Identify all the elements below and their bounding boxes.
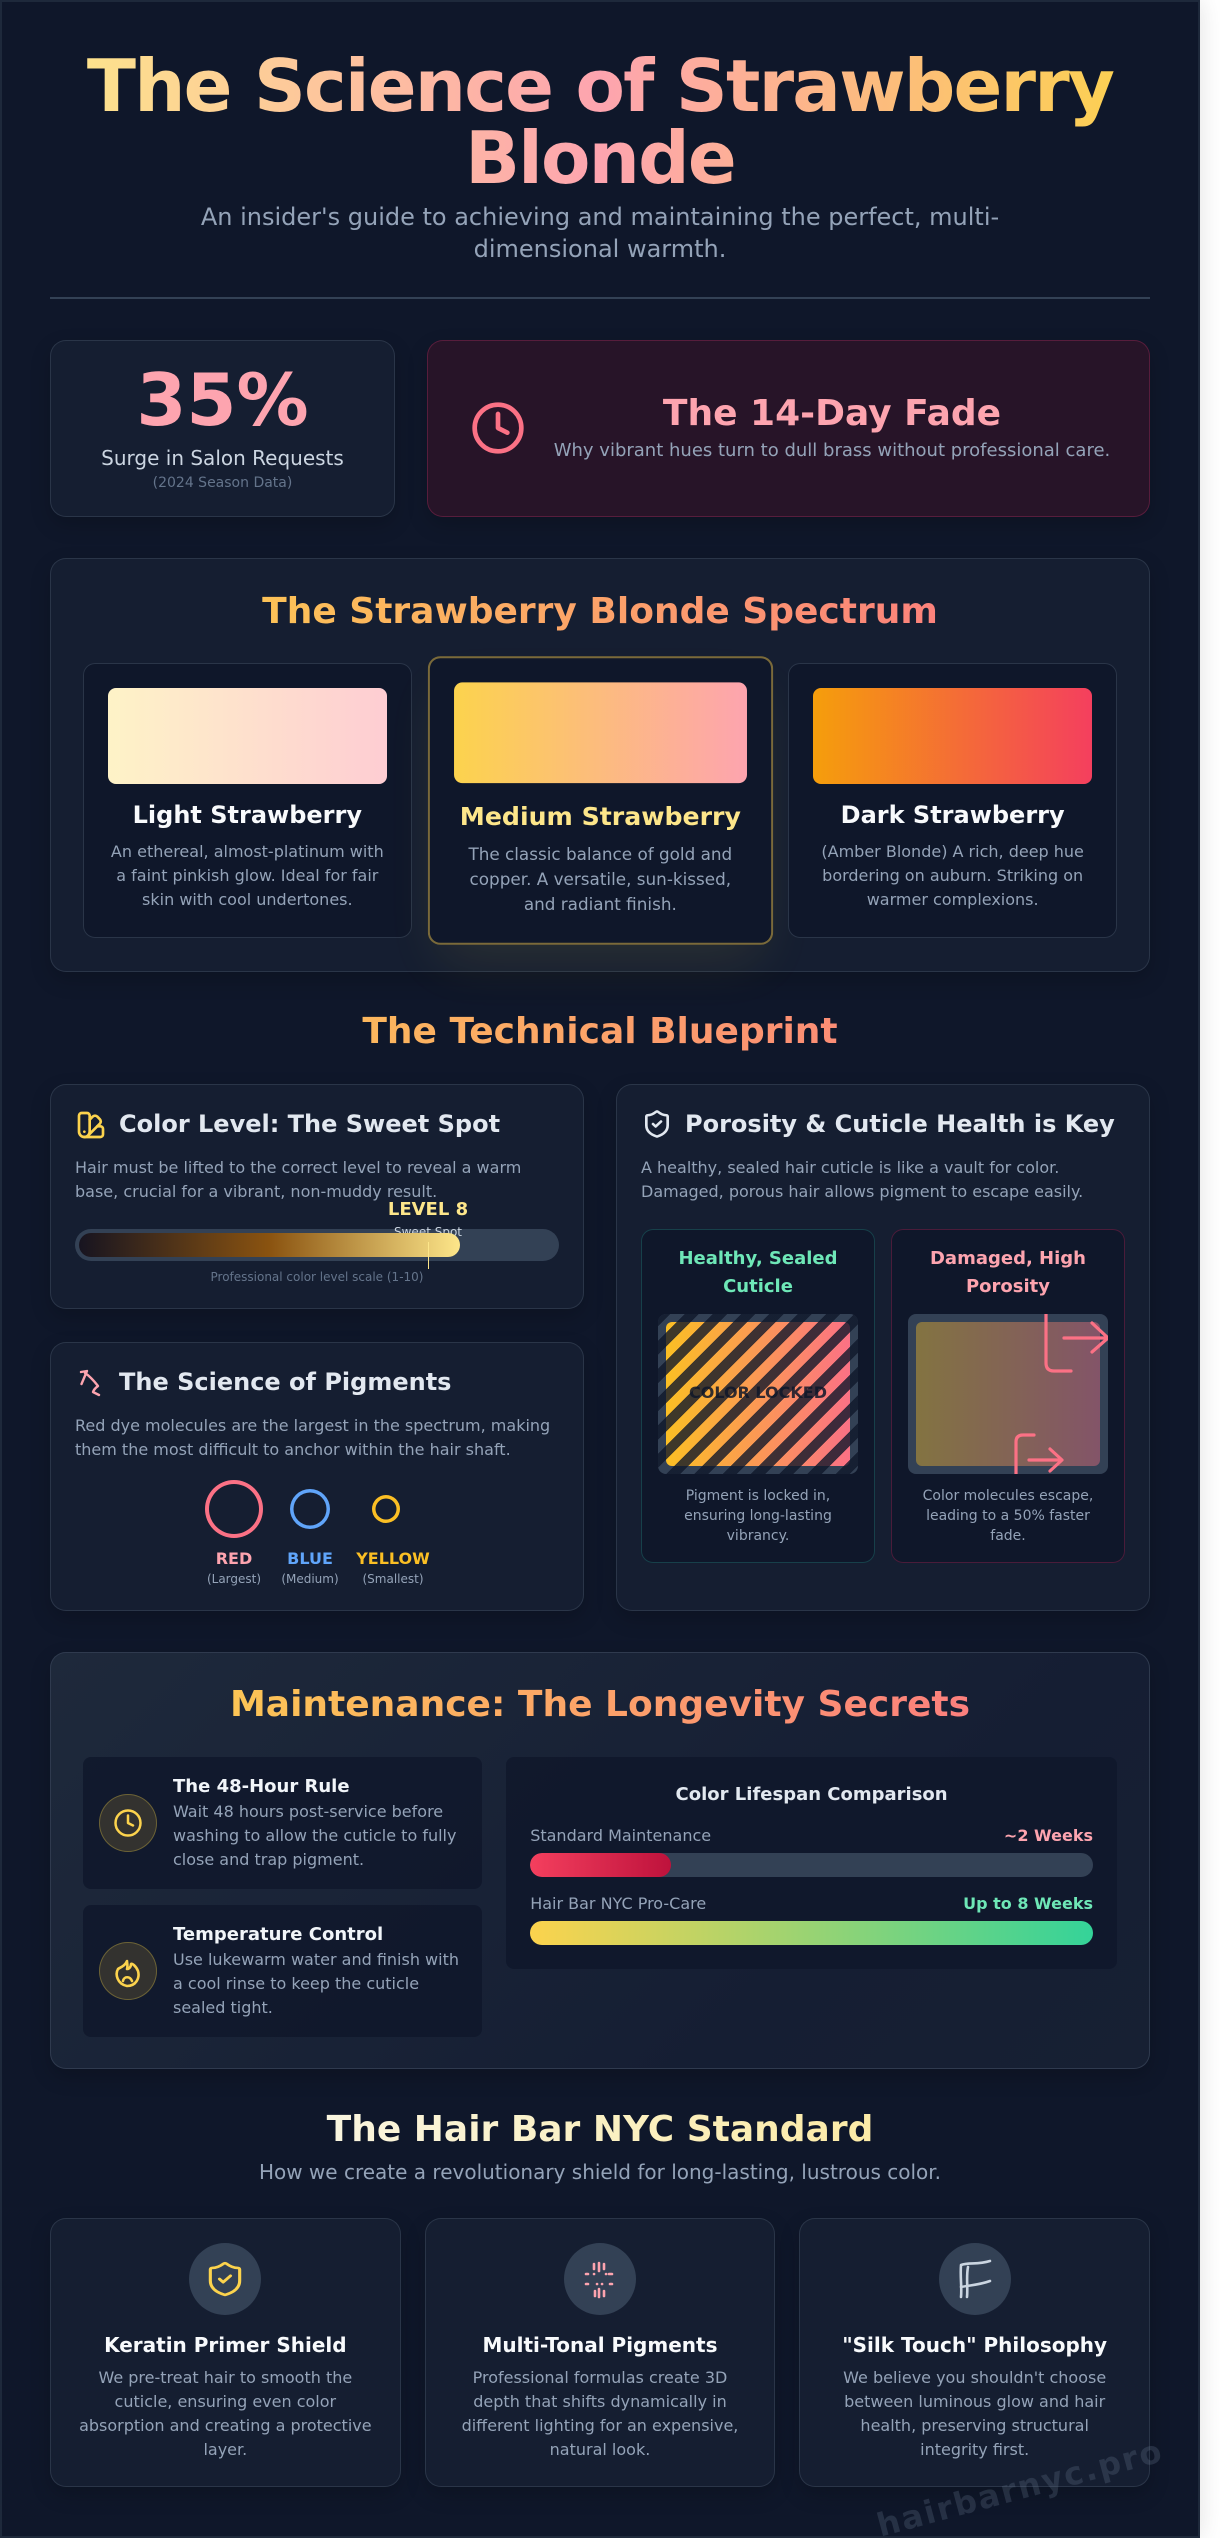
panel: 14-day fade <box>427 340 1150 517</box>
card: light strawberry <box>83 663 412 938</box>
title: Blonde <box>465 116 735 200</box>
card: damaged cuticle <box>891 1229 1125 1563</box>
heading: technical blueprint <box>50 1008 1150 1056</box>
panel: 35% surge stat <box>50 340 395 517</box>
porosity text: A healthy, sealed hair cuticle is like a vault for color. <box>641 1158 1059 1177</box>
color level text: Hair must be lifted to the correct level to reveal a warm <box>75 1158 521 1177</box>
card: healthy cuticle <box>641 1229 875 1563</box>
damaged heading: Damaged, High <box>930 1248 1086 1269</box>
molecule: yellow <box>372 1495 400 1523</box>
damaged caption: fade. <box>990 1528 1026 1544</box>
tip text: a cool rinse to keep the cuticle <box>173 1974 419 1993</box>
multi-tonal text: different lighting for an expensive, <box>462 2416 738 2435</box>
pigments text: them the most difficult to anchor within the hair shaft. <box>75 1440 511 1459</box>
tip text <box>173 1950 459 2017</box>
multi-tonal text: Professional formulas create 3D <box>473 2368 727 2387</box>
diagram: locked pigment <box>658 1314 858 1474</box>
panel: spectrum <box>50 558 1150 972</box>
card: keratin <box>50 2218 401 2487</box>
scale caption: Professional color level scale (1-10) <box>210 1270 423 1284</box>
value: 2 weeks: ~2 Weeks <box>1004 1826 1093 1845</box>
description: dark: (Amber Blonde) A rich, deep hue <box>821 842 1084 861</box>
title: The Science of Strawberry <box>87 44 1113 128</box>
keratin text: We pre-treat hair to smooth the <box>98 2368 352 2387</box>
name: dark: Dark Strawberry <box>841 801 1065 829</box>
subtitle: dimensional warmth. <box>474 235 726 263</box>
tip text: Wait 48 hours post-service before <box>173 1802 443 1821</box>
keratin text: layer. <box>203 2440 247 2459</box>
tip title: Temperature Control <box>173 1924 383 1945</box>
color level text: base, crucial for a vibrant, non-muddy result. <box>75 1182 437 1201</box>
pigments text <box>75 1416 550 1459</box>
tip: temperature <box>83 1905 482 2037</box>
healthy heading <box>678 1248 838 1297</box>
healthy caption: ensuring long-lasting <box>684 1508 832 1524</box>
bar: pro-care <box>530 1921 1093 1945</box>
description: light: a faint pinkish glow. Ideal for fair <box>116 866 378 885</box>
label: standard: Standard Maintenance <box>530 1826 711 1845</box>
fade text: Why vibrant hues turn to dull brass without professional care. <box>554 440 1110 461</box>
heading: hair bar standard <box>50 2106 1150 2154</box>
title <box>50 50 1150 194</box>
tip text: close and trap pigment. <box>173 1850 364 1869</box>
name: medium: Medium Strawberry <box>459 802 741 831</box>
multi-tonal text <box>462 2368 738 2459</box>
description: dark: warmer complexions. <box>867 890 1039 909</box>
description: light: An ethereal, almost-platinum with <box>111 842 384 861</box>
chart title: Color Lifespan Comparison <box>676 1784 948 1805</box>
icon: swatch book <box>78 1112 104 1138</box>
keratin text <box>79 2368 372 2459</box>
porosity text: Damaged, porous hair allows pigment to escape easily. <box>641 1182 1083 1201</box>
marker line <box>428 1242 429 1269</box>
silk title: "Silk Touch" Philosophy <box>842 2333 1107 2357</box>
keratin title: Keratin Primer Shield <box>104 2333 347 2357</box>
chart: color lifespan <box>506 1757 1117 1969</box>
diagram: locked pigment: COLOR LOCKED <box>689 1383 827 1402</box>
silk text <box>843 2368 1106 2459</box>
marker label: sweet spot: Sweet Spot <box>394 1225 462 1239</box>
silk text: We believe you shouldn't choose <box>843 2368 1106 2387</box>
description: dark <box>821 842 1084 909</box>
multi-tonal text: natural look. <box>550 2440 650 2459</box>
icon: pigment squiggle <box>80 1370 100 1396</box>
icon: clock <box>472 402 524 454</box>
maintenance heading: Maintenance: The Longevity Secrets <box>230 1684 970 1725</box>
stat source: (2024 Season Data) <box>153 475 292 491</box>
swatch: dark <box>813 688 1092 784</box>
description: medium: and radiant finish. <box>523 894 676 914</box>
label: red: RED <box>216 1549 252 1568</box>
label: yellow: YELLOW <box>356 1549 430 1568</box>
icon: shield badge <box>189 2243 261 2315</box>
icon: flame badge <box>99 1942 157 2000</box>
card: silk touch <box>799 2218 1150 2487</box>
tip text: Use lukewarm water and finish with <box>173 1950 459 1969</box>
damaged heading: Porosity <box>966 1276 1050 1297</box>
card: medium strawberry <box>427 656 773 945</box>
label: pro-care: Hair Bar NYC Pro-Care <box>530 1894 706 1913</box>
keratin text: cuticle, ensuring even color <box>115 2392 336 2411</box>
label: yellow size: (Smallest) <box>362 1572 424 1586</box>
description: light <box>111 842 384 909</box>
standard subtitle: How we create a revolutionary shield for long-lasting, lustrous color. <box>259 2160 941 2184</box>
label: blue: BLUE <box>287 1549 333 1568</box>
panel: color level <box>50 1084 584 1309</box>
multi-tonal title: Multi-Tonal Pigments <box>482 2333 717 2357</box>
pigments heading: The Science of Pigments <box>119 1368 451 1396</box>
scale track <box>75 1229 559 1261</box>
swatch: light <box>108 688 387 784</box>
silk text: health, preserving structural <box>860 2416 1089 2435</box>
porosity text <box>641 1158 1083 1201</box>
color level heading: Color Level: The Sweet Spot <box>119 1110 500 1138</box>
icon: silk badge <box>939 2243 1011 2315</box>
panel: porosity <box>616 1084 1150 1611</box>
tip text: sealed tight. <box>173 1998 273 2017</box>
level scale chart <box>75 1199 559 1284</box>
label: red size: (Largest) <box>207 1572 261 1586</box>
scale fill <box>79 1233 460 1257</box>
heading: hair bar standard: The Hair Bar NYC Standard <box>327 2109 873 2150</box>
silk text: integrity first. <box>920 2440 1029 2459</box>
icon: shield <box>645 1110 669 1138</box>
healthy caption <box>684 1488 832 1544</box>
tip title: The 48-Hour Rule <box>173 1776 350 1797</box>
damaged caption: Color molecules escape, <box>923 1488 1093 1504</box>
label: blue size: (Medium) <box>281 1572 339 1586</box>
diagram: escaping pigment <box>908 1314 1108 1474</box>
marker label: level 8: LEVEL 8 <box>388 1199 468 1220</box>
swatch: medium <box>454 682 746 783</box>
subtitle <box>201 203 999 263</box>
damaged caption <box>923 1488 1093 1544</box>
pigments text: Red dye molecules are the largest in the spectrum, making <box>75 1416 550 1435</box>
value: 8 weeks: Up to 8 Weeks <box>963 1894 1093 1913</box>
tip: 48-hour rule <box>83 1757 482 1889</box>
healthy heading: Healthy, Sealed <box>678 1248 838 1269</box>
icon: pigments badge <box>564 2243 636 2315</box>
color level text <box>75 1158 521 1201</box>
keratin text: absorption and creating a protective <box>79 2416 372 2435</box>
molecule: blue <box>290 1489 330 1529</box>
panel: maintenance <box>50 1652 1150 2069</box>
molecule: red <box>205 1480 263 1538</box>
damaged heading <box>930 1248 1086 1297</box>
subtitle: An insider's guide to achieving and maintaining the perfect, multi- <box>201 203 999 231</box>
healthy caption: vibrancy. <box>727 1528 789 1544</box>
multi-tonal text: depth that shifts dynamically in <box>473 2392 727 2411</box>
healthy caption: Pigment is locked in, <box>686 1488 830 1504</box>
stat number: 35% <box>136 358 309 442</box>
description: medium <box>468 844 732 914</box>
description: medium: copper. A versatile, sun-kissed, <box>469 869 731 889</box>
silk text: between luminous glow and hair <box>844 2392 1105 2411</box>
icon: clock badge <box>99 1794 157 1852</box>
panel: pigments <box>50 1342 584 1611</box>
spectrum heading: The Strawberry Blonde Spectrum <box>262 591 938 632</box>
tip text: washing to allow the cuticle to fully <box>173 1826 456 1845</box>
porosity heading: Porosity & Cuticle Health is Key <box>685 1110 1115 1138</box>
damaged caption: leading to a 50% faster <box>926 1508 1090 1524</box>
description: medium: The classic balance of gold and <box>468 844 732 864</box>
maintenance heading <box>83 1681 1117 1729</box>
healthy heading: Cuticle <box>723 1276 793 1297</box>
stat label: Surge in Salon Requests <box>101 446 344 470</box>
card: multi-tonal <box>425 2218 775 2487</box>
description: dark: bordering on auburn. Striking on <box>822 866 1083 885</box>
name: light: Light Strawberry <box>133 801 362 829</box>
fade heading: The 14-Day Fade <box>663 393 1001 434</box>
description: light: skin with cool undertones. <box>142 890 353 909</box>
spectrum heading <box>83 588 1117 636</box>
tip text <box>173 1802 456 1869</box>
card: dark strawberry <box>788 663 1117 938</box>
bar: standard <box>530 1853 1093 1877</box>
heading: technical blueprint: The Technical Blueprint <box>362 1011 838 1052</box>
